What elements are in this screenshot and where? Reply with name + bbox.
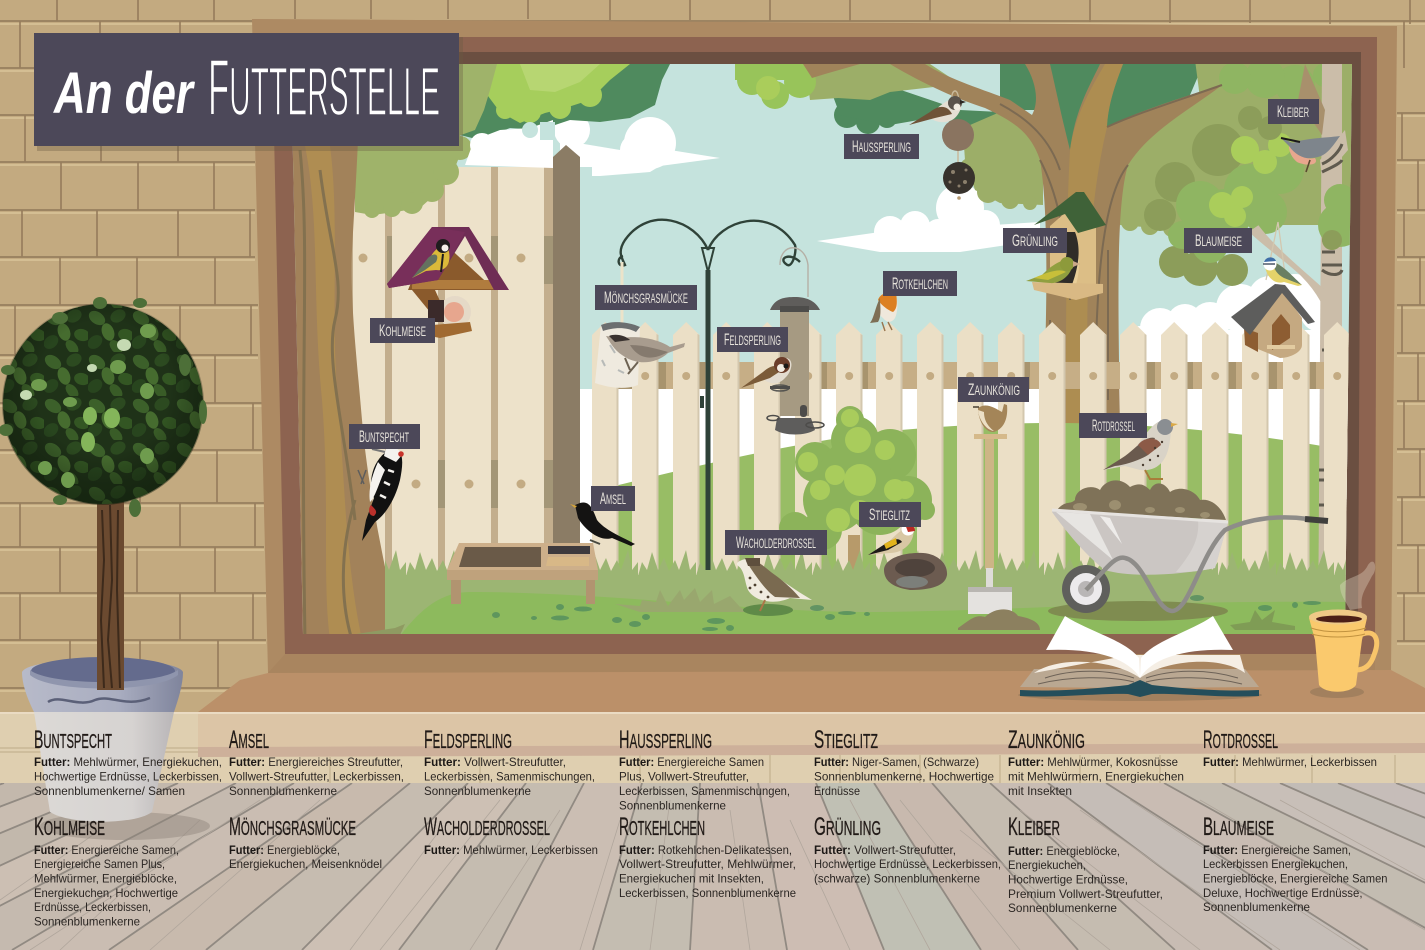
label Blaumeise: BLAUMEISE	[1195, 231, 1242, 250]
icon: bird Amsel	[570, 502, 635, 546]
text block: Grünling: Hochwertige Erdnüsse, Leckerbissen,	[814, 857, 1001, 871]
label Zaunkönig	[958, 377, 1029, 402]
hanging pole with arches	[619, 220, 800, 570]
soil heap at spade	[958, 609, 1040, 630]
text block: Stieglitz: Futter: Niger-Samen, (Schwarze)	[814, 755, 979, 769]
text block: Rotkehlchen: Futter: Rotkehlchen-Delikatessen,	[619, 843, 792, 857]
right foliage cluster	[1144, 124, 1248, 286]
text block: Zaunkönig: ZAUNKÖNIG	[1008, 726, 1085, 754]
text block: Stieglitz: Sonnenblumenkerne, Hochwertige	[814, 770, 994, 784]
book shadow	[1018, 689, 1262, 701]
text block: Kleiber: Sonnenblumenkerne	[1008, 901, 1117, 915]
nest box feeder with green roof	[1032, 192, 1106, 300]
text block: Blaumeise: Sonnenblumenkerne	[1203, 900, 1310, 914]
open book	[1020, 616, 1259, 697]
label Haussperling: HAUSSPERLING	[852, 137, 911, 156]
text block: Haussperling: Plus, Vollwert-Streufutter,	[619, 770, 749, 784]
text block: Haussperling: HAUSSPERLING	[619, 726, 712, 754]
text block: Zaunkönig: mit Insekten	[1008, 784, 1072, 798]
text block: Amsel	[229, 726, 404, 798]
text block: Kleiber: Energiekuchen,	[1008, 858, 1086, 872]
text block: Kohlmeise: Energiekuchen, Hochwertige	[34, 886, 178, 900]
label Wacholderdrossel	[725, 530, 827, 555]
title box	[34, 33, 463, 151]
text block: Kleiber: Hochwertige Erdnüsse,	[1008, 872, 1128, 886]
icon: bird Kohlmeise	[412, 239, 450, 278]
suet log feeder	[595, 262, 640, 388]
label Grünling	[1003, 228, 1067, 253]
label Stieglitz: STIEGLITZ	[869, 505, 910, 524]
text block: Blaumeise: Energieblöcke, Energiereiche Samen	[1203, 872, 1388, 886]
lower wall behind text panel	[0, 712, 1425, 783]
text block: Mönchsgrasmücke	[229, 813, 382, 871]
small garden tree	[779, 406, 935, 575]
label Feldsperling: FELDSPERLING	[724, 330, 781, 349]
text block: Kohlmeise: Energiereiche Samen Plus,	[34, 857, 165, 871]
text block: Stieglitz: STIEGLITZ	[814, 726, 878, 754]
label Buntspecht: BUNTSPECHT	[359, 427, 409, 446]
text block: Kohlmeise	[34, 813, 179, 928]
label Amsel: AMSEL	[600, 489, 626, 508]
hill	[618, 423, 1320, 575]
text block: Grünling: GRÜNLING	[814, 813, 881, 841]
text block: Feldsperling: Sonnenblumenkerne	[424, 784, 531, 798]
text block: Feldsperling	[424, 726, 595, 798]
icon: bird Grünling	[1026, 257, 1080, 283]
label Rotkehlchen	[883, 271, 957, 296]
text block: Rotkehlchen: ROTKEHLCHEN	[619, 813, 705, 841]
text block: Blaumeise: Futter: Energiereiche Samen,	[1203, 843, 1351, 857]
text block: Zaunkönig: mit Mehlwürmern, Energiekuchen	[1008, 770, 1184, 784]
icon: bird Mönchsgrasmücke	[606, 335, 685, 374]
icon: bird Kleiber	[1281, 136, 1340, 172]
text block: Rotkehlchen: Energiekuchen mit Insekten,	[619, 872, 764, 886]
label Rotkehlchen: ROTKEHLCHEN	[892, 274, 948, 293]
text block: Grünling: (schwarze) Sonnenblumenkerne	[814, 872, 980, 886]
text block: Rotdrossel: Futter: Mehlwürmer, Leckerbissen	[1203, 755, 1377, 769]
coffee mug	[1309, 610, 1377, 692]
text block: Mönchsgrasmücke: Futter: Energieblöcke,	[229, 843, 340, 857]
fat balls on string	[942, 91, 975, 200]
text block: Mönchsgrasmücke: Energiekuchen, Meisenknödel	[229, 857, 382, 871]
text block: Stieglitz: Erdnüsse	[814, 784, 860, 798]
text block: Rotkehlchen: Leckerbissen, Sonnenblumenkerne	[619, 886, 796, 900]
text block: Blaumeise: Deluxe, Hochwertige Erdnüsse,	[1203, 886, 1362, 900]
light green top	[735, 60, 816, 109]
text block: Kohlmeise: KOHLMEISE	[34, 813, 105, 841]
olive canopy left of trunk	[962, 110, 1043, 205]
icon: bird Zaunkönig	[973, 404, 1007, 432]
text block: Buntspecht	[34, 726, 222, 798]
bird house with grey roof	[1231, 222, 1315, 358]
icon: bird Feldsperling	[741, 357, 791, 389]
dark strip under branch	[830, 88, 1000, 134]
text block: Feldsperling: Futter: Vollwert-Streufutter,	[424, 755, 566, 769]
potted plant	[0, 297, 207, 822]
label Mönchsgrasmücke: MÖNCHSGRASMÜCKE	[604, 288, 688, 307]
text block: Rotkehlchen: Vollwert-Streufutter, Mehlwürmer,	[619, 857, 796, 871]
text block: Feldsperling: Leckerbissen, Samenmischungen,	[424, 770, 595, 784]
window sill	[198, 670, 1425, 712]
text block: Rotkehlchen	[619, 813, 796, 900]
text block: Kleiber: Futter: Energieblöcke,	[1008, 844, 1120, 858]
species guide	[34, 726, 1388, 928]
text block: Feldsperling: FELDSPERLING	[424, 726, 512, 754]
text block: Kohlmeise: Erdnüsse, Leckerbissen,	[34, 900, 151, 914]
title box: FUTTERSTELLE	[208, 43, 440, 132]
text block: Kleiber	[1008, 813, 1163, 915]
background: brick wall	[0, 0, 1425, 712]
label Buntspecht	[349, 424, 420, 449]
text block: Buntspecht: Hochwertige Erdnüsse, Leckerbissen,	[34, 770, 222, 784]
text block: Buntspecht: Sonnenblumenkerne/ Samen	[34, 784, 185, 798]
birch tree	[1252, 64, 1350, 566]
label Kleiber	[1268, 99, 1319, 124]
garden spade	[968, 434, 1012, 614]
text block: Buntspecht: Futter: Mehlwürmer, Energiekuchen,	[34, 755, 222, 769]
feeder with purple roof	[387, 227, 509, 338]
icon: bird Buntspecht	[358, 447, 404, 541]
icon: bird Wacholderdrossel	[737, 558, 812, 616]
left tree trunk	[292, 146, 385, 634]
label Kohlmeise	[370, 318, 435, 343]
icon: bird Rotdrossel	[1103, 419, 1178, 479]
text block: Wacholderdrossel: WACHOLDERDROSSEL	[424, 813, 550, 841]
big tree foliage	[735, 58, 1360, 286]
garden scene	[285, 58, 1362, 640]
ground	[357, 550, 1346, 634]
dark canopy behind trunk	[1000, 64, 1198, 150]
label Blaumeise	[1184, 228, 1252, 253]
text block: Kohlmeise: Sonnenblumenkerne	[34, 914, 140, 928]
label Wacholderdrossel: WACHOLDERDROSSEL	[736, 533, 816, 552]
icon: bird Haussperling	[909, 96, 966, 125]
wooden floor	[0, 783, 1425, 950]
text block: Amsel: AMSEL	[229, 726, 269, 754]
text block: Kohlmeise: Futter: Energiereiche Samen,	[34, 843, 179, 857]
plant leaf ball	[0, 297, 207, 517]
low white cloud band behind fence	[585, 389, 1355, 499]
text block: Kleiber: Premium Vollwert-Streufutter,	[1008, 887, 1163, 901]
front-left fence	[350, 145, 592, 577]
label Kohlmeise: KOHLMEISE	[379, 321, 426, 340]
text block: Rotdrossel: ROTDROSSEL	[1203, 726, 1278, 754]
back picket fence	[585, 322, 1350, 582]
label Rotdrossel	[1079, 413, 1147, 438]
stone bird bath	[884, 553, 947, 590]
text block: Wacholderdrossel	[424, 813, 598, 857]
text block: Blaumeise	[1203, 813, 1388, 914]
label Amsel	[591, 486, 635, 511]
plant pot shadow on floor	[40, 812, 210, 840]
text block: Amsel: Sonnenblumenkerne	[229, 784, 337, 798]
label Haussperling	[844, 134, 919, 159]
title: An der: An der	[52, 61, 196, 126]
text block: Haussperling: Sonnenblumenkerne	[619, 798, 726, 812]
wheelbarrow	[1048, 480, 1328, 621]
text block: Blaumeise: Leckerbissen Energiekuchen,	[1203, 857, 1348, 871]
icon: bird Blaumeise	[1263, 257, 1302, 286]
steam from mug	[1340, 562, 1375, 610]
icon: bird Rotkehlchen	[870, 292, 897, 331]
wooden table feeder	[447, 543, 598, 604]
text block: Haussperling: Leckerbissen, Samenmischungen,	[619, 784, 790, 798]
label Kleiber: KLEIBER	[1277, 102, 1309, 121]
label Feldsperling	[717, 327, 788, 352]
text block: Amsel: Futter: Energiereiches Streufutter,	[229, 755, 403, 769]
text block: Zaunkönig: Futter: Mehlwürmer, Kokosnüsse	[1008, 755, 1178, 769]
text block: Zaunkönig	[1008, 726, 1184, 798]
left tree foliage	[355, 64, 670, 218]
window frame	[252, 19, 1397, 673]
text block: Amsel: Vollwert-Streufutter, Leckerbissen,	[229, 770, 404, 784]
olive canopy top	[805, 64, 960, 100]
text block: Rotdrossel	[1203, 726, 1377, 769]
text block: Blaumeise: BLAUMEISE	[1203, 813, 1274, 841]
text block: Grünling: Futter: Vollwert-Streufutter,	[814, 843, 956, 857]
label Zaunkönig: ZAUNKÖNIG	[968, 380, 1020, 399]
label Grünling: GRÜNLING	[1012, 231, 1058, 250]
text block: Stieglitz	[814, 726, 994, 798]
text block: Kohlmeise: Mehlwürmer, Energieblöcke,	[34, 872, 177, 886]
text block: Grünling	[814, 813, 1001, 886]
text block: Haussperling: Futter: Energiereiche Samen	[619, 755, 764, 769]
label Mönchsgrasmücke	[595, 285, 697, 310]
sky	[285, 60, 1360, 640]
text block: Buntspecht: BUNTSPECHT	[34, 726, 112, 754]
label Stieglitz	[859, 502, 921, 527]
mug shadow	[1310, 686, 1364, 698]
pot	[22, 657, 183, 822]
text block: Kleiber: KLEIBER	[1008, 813, 1060, 841]
text block: Haussperling	[619, 726, 790, 812]
label Rotdrossel: ROTDROSSEL	[1092, 416, 1135, 435]
big tree trunk	[803, 64, 1222, 425]
text block: Mönchsgrasmücke: MÖNCHSGRASMÜCKE	[229, 813, 356, 841]
clouds	[554, 112, 1355, 499]
seed tube feeder	[767, 248, 824, 434]
icon: bird Stieglitz	[868, 527, 915, 555]
olive canopy right	[1110, 60, 1360, 228]
scene labels	[349, 99, 1319, 555]
text block: Wacholderdrossel: Futter: Mehlwürmer, Leckerbissen	[424, 843, 598, 857]
plant stem	[97, 500, 124, 690]
